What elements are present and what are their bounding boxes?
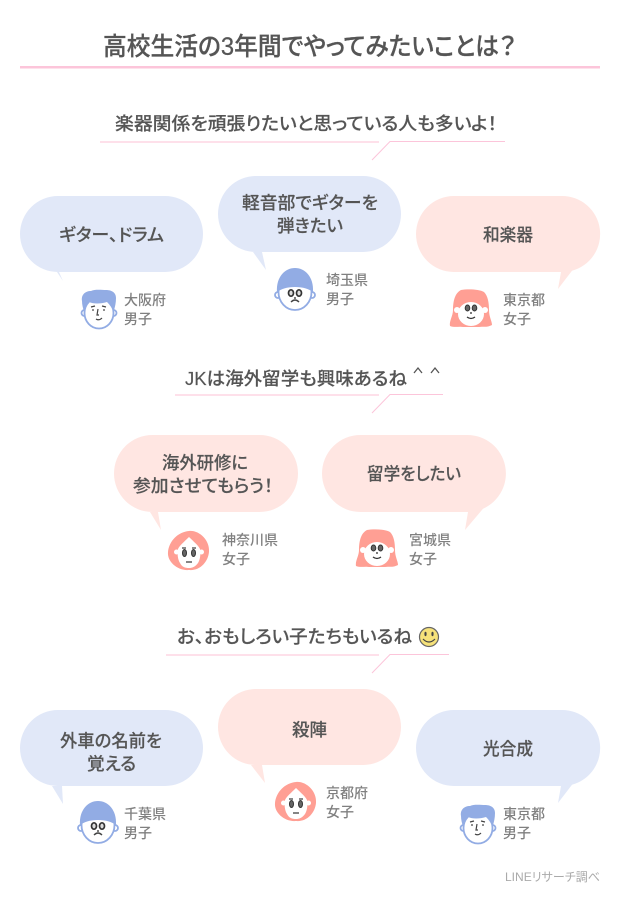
respondent: Kyoto girl: 女子 [326,804,354,820]
bubble: foreign car names: 外車の名前を [60,731,162,751]
respondent: Tokyo girl [450,289,545,327]
respondent: Saitama boy: 男子 [326,291,354,307]
bubble: study abroad: 留学をしたい [367,464,461,484]
section heading: study abroad [175,368,443,413]
respondent: Osaka boy: 大阪府 [124,292,166,308]
respondent: Tokyo boy: 東京都 [503,806,545,822]
bubble: Japanese instruments: 和楽器 [483,225,533,245]
bubble: guitar and drums [20,196,203,281]
respondent: Miyagi girl: 宮城県 [409,532,451,548]
bubble: light music club guitar [218,176,401,270]
respondent: Miyagi girl: 女子 [409,551,437,567]
bubble: light music club guitar: 弾きたい [277,216,343,236]
bubble: foreign car names: 覚える [87,754,136,774]
bubble: overseas training: 参加させてもらう！ [133,476,273,496]
bubble: light music club guitar: 軽音部でギターを [242,193,378,213]
section heading: interesting: お、おもしろい子たちもいるね [177,627,412,647]
respondent: Kanagawa girl [168,531,278,570]
section heading: study abroad: JKは海外留学も興味あるね [185,369,407,389]
respondent: Kyoto girl: 京都府 [326,785,368,801]
bubble: overseas training: 海外研修に [162,453,248,473]
respondent: Kyoto girl [275,782,368,821]
section heading: interesting [166,627,449,673]
bubble: Japanese instruments [416,196,600,289]
respondent: Tokyo boy: 男子 [503,825,531,841]
bubble: photosynthesis: 光合成 [483,739,533,759]
source credit: LINEリサーチ調べ [505,870,600,884]
respondent: Chiba boy: 千葉県 [124,806,166,822]
bubble: photosynthesis [416,710,600,803]
bubble: foreign car names [20,710,203,804]
bubble: overseas training [114,435,298,530]
respondent: Saitama boy: 埼玉県 [326,272,368,288]
respondent: Miyagi girl [356,529,451,567]
section heading: instruments: 楽器関係を頑張りたいと思っている人も多いよ！ [115,114,497,134]
respondent: Osaka boy [82,290,166,328]
title underline [20,66,600,68]
respondent: Osaka boy: 男子 [124,311,152,327]
respondent: Tokyo girl: 女子 [503,311,531,327]
respondent: Chiba boy: 男子 [124,825,152,841]
respondent: Saitama boy [275,268,368,310]
title: 高校生活の3年間でやってみたいことは？ [103,33,516,61]
bubble: guitar and drums: ギター、ドラム [59,225,164,245]
bubble: sword fighting [218,689,401,783]
icon: smiley [420,628,438,646]
section heading: instruments [100,114,505,160]
bubble: study abroad [322,435,506,530]
respondent: Kanagawa girl: 女子 [222,551,250,567]
bubble: sword fighting: 殺陣 [292,720,327,740]
respondent: Chiba boy [78,801,166,843]
respondent: Tokyo girl: 東京都 [503,292,545,308]
respondent: Tokyo boy [460,805,545,844]
respondent: Kanagawa girl: 神奈川県 [222,532,278,548]
